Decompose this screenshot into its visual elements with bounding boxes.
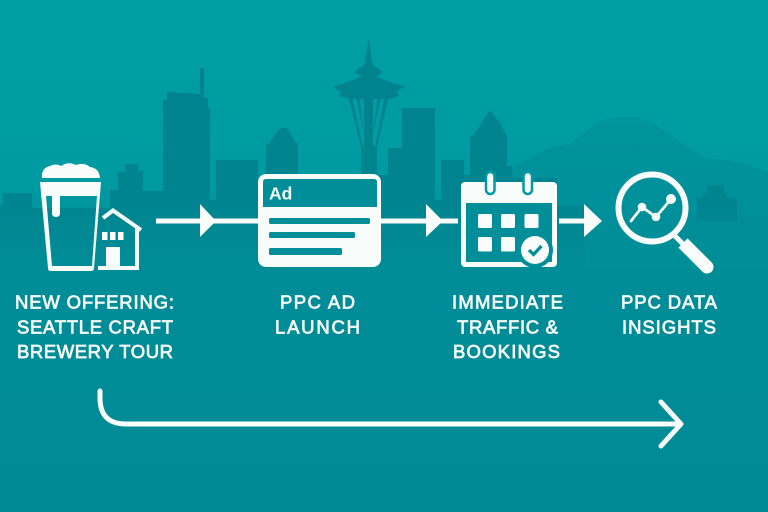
glass body xyxy=(40,182,101,271)
label: ppc data insights: PPC DATA xyxy=(621,292,718,312)
space needle xyxy=(333,38,405,176)
check badge xyxy=(517,232,553,268)
icon: magnifying glass with chart xyxy=(618,174,714,274)
calendar rings xyxy=(486,172,532,194)
label: new offering: NEW OFFERING: xyxy=(15,292,174,312)
arrow: offering to ad xyxy=(156,204,260,237)
right low ground xyxy=(585,215,768,268)
label: ppc ad launch: PPC AD xyxy=(280,292,355,312)
mountain silhouette xyxy=(505,117,768,268)
label: immediate traffic and bookings: TRAFFIC & xyxy=(457,316,559,338)
magnifier handle xyxy=(675,236,686,247)
ad label: Ad xyxy=(269,184,292,204)
label: immediate traffic and bookings: IMMEDIATE xyxy=(452,292,563,312)
label: new offering: BREWERY TOUR xyxy=(17,341,173,362)
left low buildings xyxy=(0,164,143,268)
long timeline arrow xyxy=(100,391,681,446)
city skyline silhouette xyxy=(0,38,737,268)
icon: beer glass xyxy=(40,163,101,271)
label: new offering xyxy=(15,292,174,362)
icon: ad window xyxy=(258,174,381,267)
label: new offering: SEATTLE CRAFT xyxy=(17,316,173,338)
label: ppc ad launch xyxy=(275,292,360,338)
beer foam xyxy=(42,163,100,178)
trend line chart xyxy=(631,194,676,221)
tall tower with antenna xyxy=(143,68,210,268)
arrow: calendar to insights xyxy=(559,204,602,237)
ad copy lines xyxy=(269,218,370,255)
icon: brewery house xyxy=(98,210,141,270)
mid buildings xyxy=(210,128,340,268)
far right building xyxy=(697,185,737,222)
right-of-needle buildings xyxy=(340,108,585,268)
label: ppc data insights: INSIGHTS xyxy=(622,316,716,338)
icon: calendar xyxy=(461,172,557,268)
label: immediate traffic and bookings xyxy=(452,292,563,362)
label: immediate traffic and bookings: BOOKINGS xyxy=(453,341,560,362)
calendar day squares xyxy=(478,214,538,252)
label: ppc data insights xyxy=(621,292,718,338)
label: ppc ad launch: LAUNCH xyxy=(275,316,360,338)
arrow: ad to calendar xyxy=(380,204,458,237)
